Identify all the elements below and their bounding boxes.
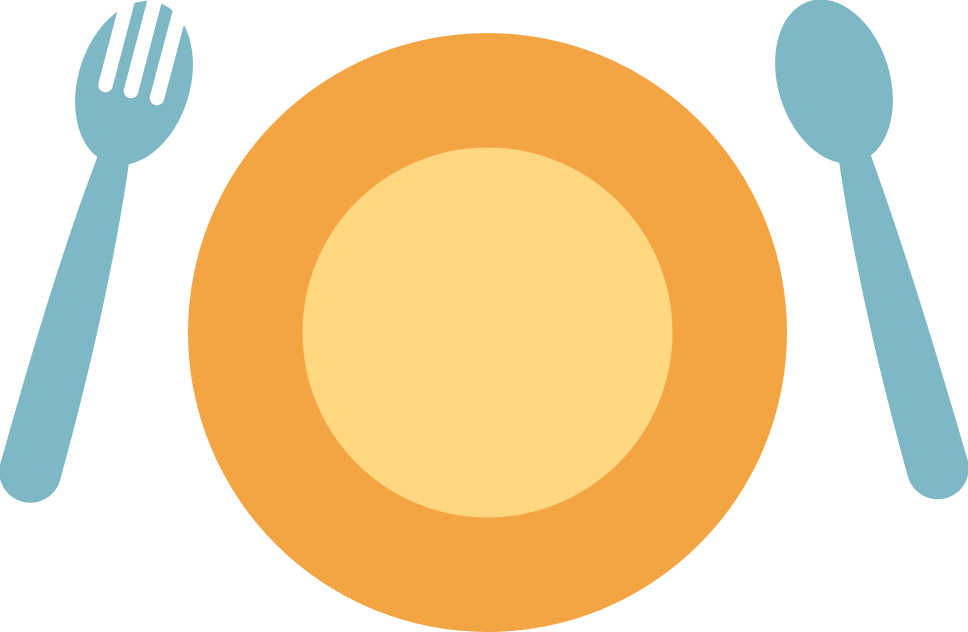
plate centre bbox=[302, 148, 672, 518]
icon: fork bbox=[0, 0, 212, 503]
spoon handle bbox=[839, 153, 968, 499]
spoon bowl bbox=[756, 0, 912, 178]
fork handle bbox=[0, 155, 129, 503]
fork tine gaps bbox=[106, 0, 187, 98]
icon: spoon bbox=[756, 0, 968, 499]
plate rim bbox=[188, 33, 787, 632]
fork head bbox=[56, 0, 212, 180]
icon: plate bbox=[188, 33, 787, 632]
